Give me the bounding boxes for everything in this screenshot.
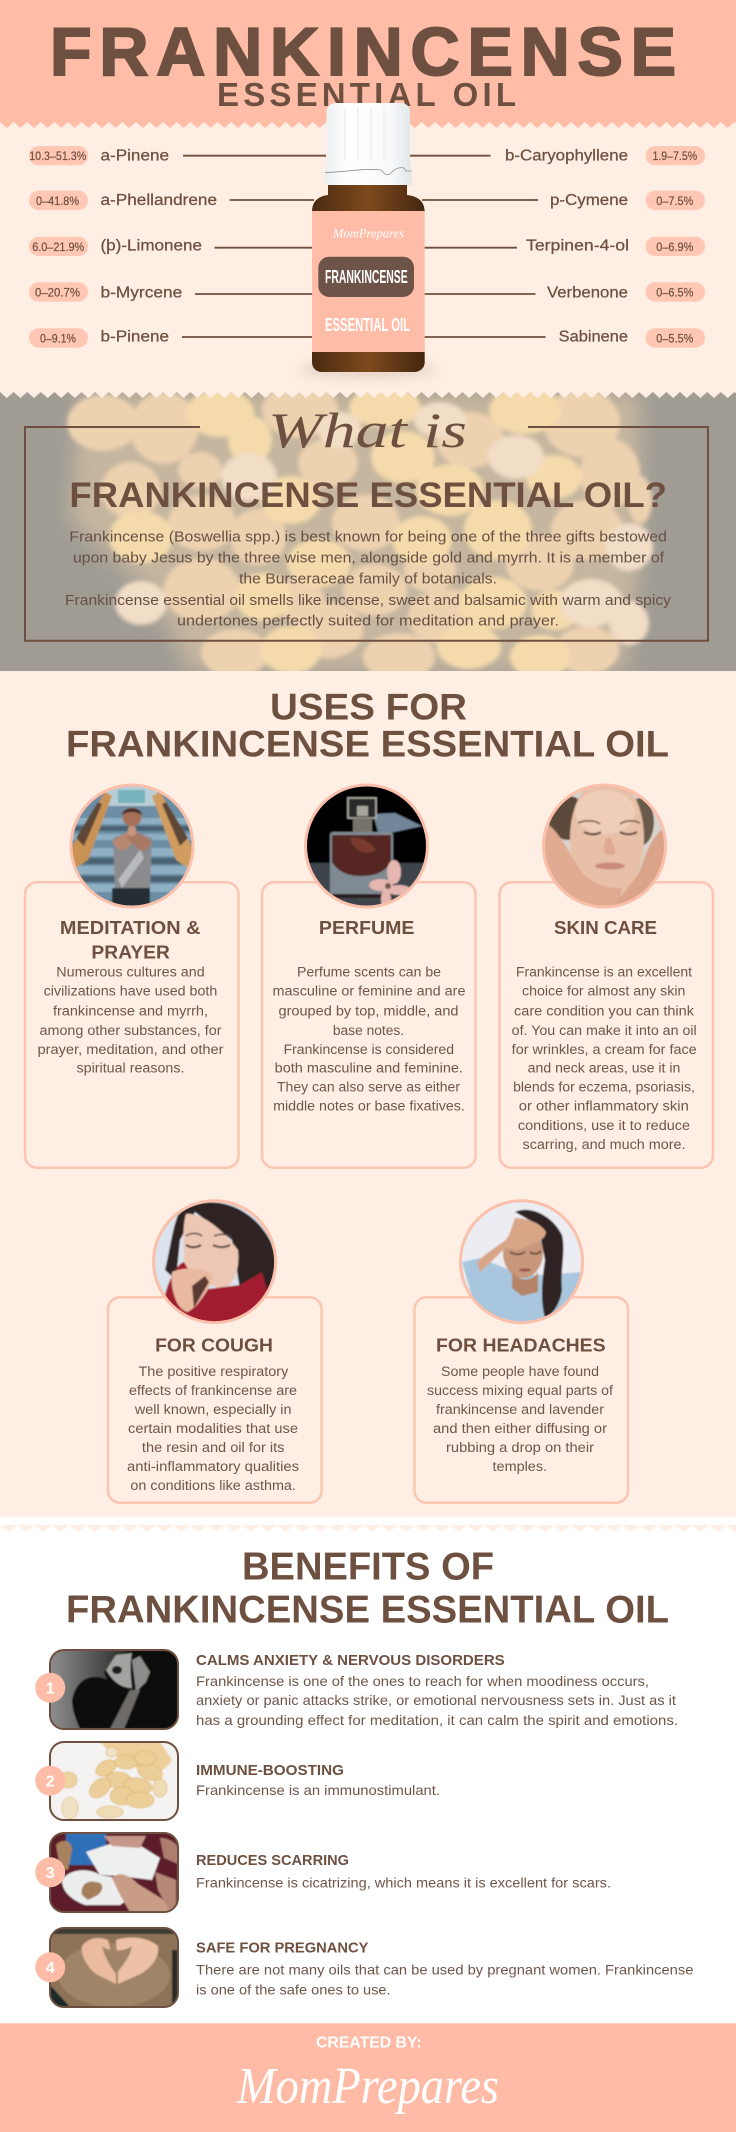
card body: prayer, meditation, and other	[38, 1042, 224, 1057]
photo: capsules	[50, 1742, 178, 1820]
compound row: Sabinene: 0–5.5%	[656, 331, 694, 345]
compound row: p-Cymene	[422, 191, 705, 210]
compound row: Verbenone: Verbenone	[547, 285, 628, 302]
benefit text: is one of the safe ones to use.	[196, 1981, 391, 1997]
card body: The positive respiratory	[138, 1364, 289, 1379]
card title: FOR COUGH	[155, 1336, 273, 1356]
card body: or other inflammatory skin	[519, 1099, 689, 1114]
background photo: frankincense resin	[0, 382, 736, 681]
panel: footer	[0, 2023, 736, 2132]
bottle label text: MomPrepares	[332, 226, 404, 241]
benefit 1: calms anxiety	[35, 1650, 678, 1729]
number badge: 4	[46, 1960, 55, 1977]
compound row: b-Pinene: 0–9.1%	[40, 331, 76, 345]
compound row: a-Pinene	[29, 146, 326, 165]
number badge: 1	[46, 1680, 55, 1698]
description text	[65, 530, 672, 630]
photo: distressed man	[50, 1650, 178, 1729]
card body: base notes.	[333, 1023, 404, 1038]
card body: Frankincense is an excellent	[516, 965, 692, 980]
benefit text: Frankincense is one of the ones to reach for when moodiness occurs,	[196, 1673, 649, 1689]
zigzag divider	[0, 1525, 736, 1532]
panel: for headaches	[414, 1200, 628, 1503]
heading: uses for frankincense essential oil: USES FOR	[270, 686, 467, 727]
card body: for wrinkles, a cream for face	[512, 1042, 697, 1057]
compound row: Verbenone	[422, 282, 705, 302]
compound row: b-Myrcene: b-Myrcene	[100, 285, 182, 302]
compound row: Terpinen-4-ol: 0–6.9%	[656, 240, 694, 254]
number badge	[35, 1766, 65, 1796]
card body: civilizations have used both	[44, 984, 217, 999]
benefit text: Frankincense is an immunostimulant.	[196, 1782, 440, 1798]
card title: FOR HEADACHES	[436, 1336, 606, 1356]
subtitle: ESSENTIAL OIL	[217, 76, 516, 113]
frame	[25, 427, 708, 641]
compound row: b-Myrcene	[29, 282, 314, 302]
compound row: b-Caryophyllene: 1.9–7.5%	[652, 149, 697, 163]
card title: PERFUME	[319, 918, 414, 938]
card body	[38, 965, 224, 1076]
card body: effects of frankincense are	[129, 1383, 297, 1398]
card body: among other substances, for	[40, 1023, 222, 1038]
card body: care condition you can think	[514, 1004, 694, 1019]
description text: undertones perfectly suited for meditation and prayer.	[177, 614, 559, 630]
compound row: Limonene	[29, 237, 314, 256]
heading: benefits of frankincense essential oil: BENEFITS OF	[242, 1545, 494, 1588]
compound row: Limonene: 6.0–21.9%	[32, 240, 84, 254]
heading: benefits of frankincense essential oil: FRANKINCENSE ESSENTIAL OIL	[66, 1589, 669, 1632]
title: FRANKINCENSE	[50, 14, 676, 90]
benefit text: has a grounding effect for meditation, it can calm the spirit and emotions.	[196, 1712, 678, 1728]
created by label: CREATED BY:	[316, 2035, 422, 2052]
card body: scarring, and much more.	[522, 1137, 686, 1152]
photo: woman with headache	[460, 1200, 584, 1325]
heading: uses for frankincense essential oil	[66, 686, 669, 765]
card body: conditions, use it to reduce	[518, 1118, 690, 1133]
card title: SKIN CARE	[554, 918, 657, 938]
card body: spiritual reasons.	[76, 1061, 184, 1076]
heading: frankincense essential oil: FRANKINCENSE ESSENTIAL OIL?	[69, 475, 667, 515]
panel: perfume	[262, 785, 476, 1168]
card body: middle notes or base fixatives.	[273, 1099, 465, 1114]
compound row: b-Pinene	[29, 328, 314, 348]
heading: uses for frankincense essential oil: FRANKINCENSE ESSENTIAL OIL	[66, 724, 669, 765]
compound row: Sabinene: Sabinene	[559, 329, 628, 346]
photo: facial massage	[543, 776, 667, 909]
icon: essential oil bottle: ESSENTIAL OIL	[325, 315, 410, 335]
benefit 4: safe for pregnancy	[35, 1928, 694, 2007]
card body: on conditions like asthma.	[130, 1478, 296, 1493]
card body: choice for almost any skin	[522, 984, 685, 999]
card body: masculine or feminine and are	[272, 984, 466, 999]
compound row: a-Phellandrene: a-Phellandrene	[100, 192, 217, 209]
card body	[127, 1364, 299, 1493]
benefit 3: reduces scarring	[35, 1833, 611, 1912]
number badge	[35, 1952, 65, 1982]
compound row: b-Caryophyllene: b-Caryophyllene	[505, 148, 628, 165]
heading: benefits of frankincense essential oil	[66, 1545, 669, 1632]
description text: Frankincense essential oil smells like incense, sweet and balsamic with warm and spicy	[65, 593, 672, 609]
card body: frankincense and lavender	[436, 1402, 605, 1417]
compound row: Terpinen-4-ol: Terpinen-4-ol	[526, 238, 629, 255]
number badge	[35, 1857, 65, 1887]
card body	[272, 965, 466, 1114]
card body: and then either diffusing or	[433, 1421, 608, 1436]
card body: rubbing a drop on their	[446, 1440, 595, 1455]
card body: anti-inflammatory qualities	[127, 1459, 299, 1474]
compound row: a-Pinene: 10.3–51.3%	[29, 149, 86, 163]
benefit text	[196, 1961, 694, 1997]
compound row: b-Myrcene: 0–20.7%	[35, 285, 80, 299]
compound row: a-Pinene: a-Pinene	[100, 148, 169, 165]
panel: chemical constituents	[29, 146, 705, 348]
compound row: Terpinen-4-ol	[422, 237, 705, 256]
panel: skin care	[500, 776, 713, 1168]
card body	[427, 1364, 613, 1474]
card body: and neck areas, use it in	[528, 1061, 680, 1076]
card body: temples.	[493, 1459, 547, 1474]
description text: the Burseraceae family of botanicals.	[239, 571, 497, 587]
card body: Frankincense is considered	[284, 1042, 454, 1057]
card body: They can also serve as either	[277, 1080, 461, 1095]
card body: the resin and oil for its	[142, 1440, 285, 1455]
panel: meditation and prayer	[25, 784, 238, 1168]
icon: essential oil bottle	[298, 103, 438, 378]
card body: grouped by top, middle, and	[278, 1004, 458, 1019]
panel: what is frankincense	[0, 382, 736, 681]
page background	[0, 0, 736, 1517]
card body: frankincense and myrrh,	[53, 1004, 208, 1019]
icon: essential oil bottle: FRANKINCENSE	[325, 267, 408, 287]
compound row: b-Pinene: b-Pinene	[100, 329, 169, 346]
compound row: Limonene: (þ)-Limonene	[100, 238, 202, 255]
panel: meditation and prayer: PRAYER	[91, 942, 170, 962]
description text: Frankincense (Boswellia spp.) is best known for being one of the three gifts bestowed	[69, 530, 667, 546]
number badge: 2	[46, 1774, 55, 1790]
compound row: a-Phellandrene	[29, 191, 314, 210]
heading: what is: What is	[268, 402, 467, 458]
panel: header banner	[0, 0, 736, 128]
card body: Perfume scents can be	[297, 965, 441, 980]
compound row: a-Phellandrene: 0–41.8%	[36, 194, 79, 208]
card body: blends for eczema, psoriasis,	[513, 1080, 695, 1095]
benefit title: CALMS ANXIETY & NERVOUS DISORDERS	[196, 1652, 505, 1669]
benefit text: There are not many oils that can be used by pregnant women. Frankincense	[196, 1961, 694, 1977]
card body: both masculine and feminine.	[275, 1061, 463, 1076]
compound row: Sabinene	[422, 328, 705, 348]
card body: well known, especially in	[134, 1402, 291, 1417]
benefit title: SAFE FOR PREGNANCY	[196, 1939, 368, 1956]
card body: certain modalities that use	[128, 1421, 298, 1436]
benefit text: anxiety or panic attacks strike, or emotional nervousness sets in. Just as it	[196, 1692, 676, 1708]
card body: success mixing equal parts of	[427, 1383, 613, 1398]
compound row: b-Caryophyllene	[410, 146, 705, 165]
number badge: 3	[46, 1865, 55, 1882]
benefit 2: immune-boosting	[35, 1742, 440, 1820]
benefit text	[196, 1673, 678, 1728]
card body	[512, 965, 697, 1152]
compound row: p-Cymene: 0–7.5%	[656, 194, 694, 208]
photo: hands making a heart on belly	[50, 1928, 178, 2007]
description text: upon baby Jesus by the three wise men, alongside gold and myrrh. It is a member of	[73, 551, 665, 567]
card body: Numerous cultures and	[56, 965, 205, 980]
logo: MomPrepares: MomPrepares	[236, 2058, 499, 2115]
compound row: Verbenone: 0–6.5%	[656, 285, 694, 299]
card body: of. You can make it into an oil	[512, 1023, 697, 1038]
panel: for cough	[108, 1200, 322, 1503]
benefit title: REDUCES SCARRING	[196, 1852, 349, 1869]
number badge	[35, 1673, 65, 1703]
card body: Some people have found	[441, 1364, 599, 1379]
photo: perfume bottle	[305, 785, 429, 909]
benefit text: Frankincense is cicatrizing, which means it is excellent for scars.	[196, 1874, 611, 1890]
benefit title: IMMUNE-BOOSTING	[196, 1762, 344, 1779]
photo: man praying in church aisle	[70, 784, 194, 908]
card title: MEDITATION &	[60, 918, 200, 938]
photo: woman coughing	[153, 1200, 277, 1325]
compound row: p-Cymene: p-Cymene	[550, 192, 628, 209]
photo: bandaged hands	[50, 1833, 178, 1912]
